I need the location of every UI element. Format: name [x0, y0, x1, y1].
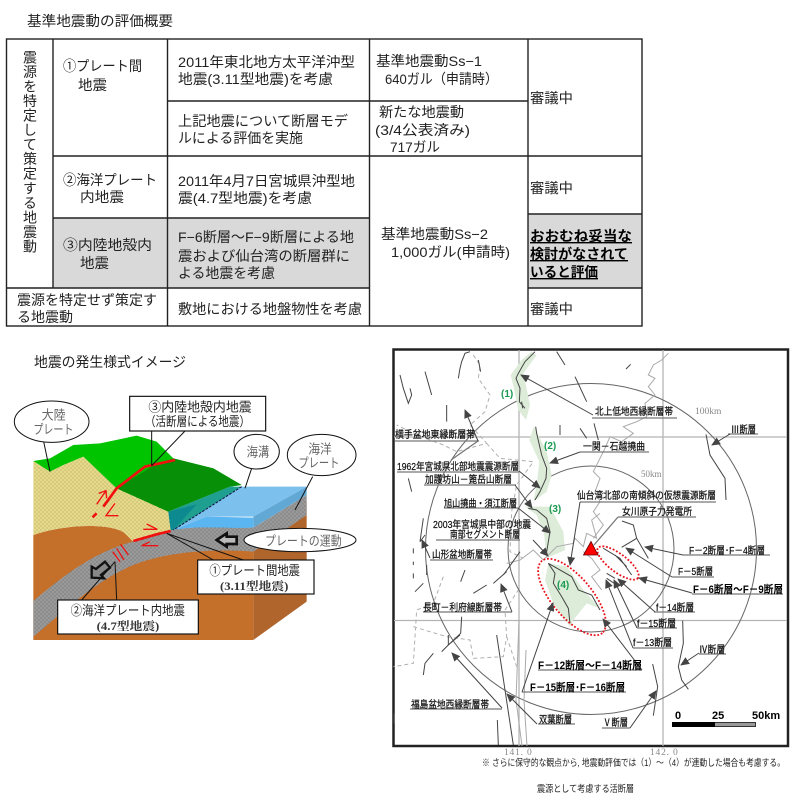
row 1 label: 地震 — [78, 77, 107, 93]
dotted ellipse: fault group 4 — [526, 548, 618, 646]
Ss-1: 基準地震動Ss−1 — [376, 53, 482, 69]
callout: interplate earthquake — [198, 560, 314, 594]
row 1 condition B: ルによる評価を実施 — [178, 130, 303, 146]
status: under review — [530, 90, 573, 317]
status: generally appropriate: おおむね妥当な — [530, 228, 632, 244]
callout: intraslab earthquake: ②海洋プレート内地震 — [71, 603, 185, 618]
status: generally appropriate — [530, 228, 632, 280]
circle distance labels: 50km — [641, 469, 662, 479]
fault labels: 一関－石越撓曲 — [583, 440, 645, 453]
status: under review: 審議中 — [530, 301, 573, 317]
row 1 label — [63, 58, 142, 93]
row 2 label — [63, 172, 157, 205]
fault labels: 仙台湾北部の南傾斜の仮想震源断層 — [577, 489, 716, 502]
arrow: subduction — [92, 562, 110, 578]
fault labels: F－6断層～F－9断層 — [693, 582, 783, 596]
graticule — [394, 350, 787, 746]
ellipse: oceanic plate — [287, 434, 356, 476]
fault labels: F－2断層･F－4断層 — [689, 545, 765, 557]
ellipse: plate motion: プレートの運動 — [265, 534, 342, 549]
arrow: plate movement — [217, 533, 237, 547]
green fault zones — [511, 352, 600, 627]
diagram: plate cross-section — [14, 396, 356, 640]
heading: earthquake type image: 地震の発生様式イメージ — [34, 354, 186, 370]
fault labels: 横手盆地東縁断層帯 — [395, 428, 475, 441]
longitude labels — [504, 748, 679, 758]
shaded cells — [53, 214, 642, 288]
fault labels: Ⅲ断層 — [731, 424, 756, 436]
callout: intraslab earthquake — [58, 600, 198, 634]
row 3 condition: F−6断層～F−9断層による地 — [178, 229, 354, 245]
Ss-1: 640ガル（申請時） — [385, 71, 498, 87]
fault labels: f－13断層 — [633, 637, 672, 649]
row 4 label: 震源を特定せず策定す — [17, 292, 157, 308]
map caption: 震源として考慮する活断層 — [537, 783, 634, 795]
callout: interplate earthquake: ①プレート間地震 — [209, 563, 300, 578]
icon: Onagawa nuclear power station — [584, 542, 598, 555]
Ss-1 — [376, 53, 498, 87]
fault labels: 1962年宮城県北部地震震源断層 — [397, 460, 519, 473]
fault labels: 福島盆地西縁断層帯 — [411, 698, 489, 711]
scale bar — [672, 710, 780, 727]
leader arrows — [422, 375, 730, 728]
fault labels: 2003年宮城県中部の地震 — [433, 518, 531, 531]
continental plate — [33, 457, 171, 542]
red fault lines — [93, 460, 175, 562]
Ss-2 — [381, 226, 510, 260]
fault labels: 加護坊山－篦岳山断層 — [425, 473, 512, 486]
scale bar: 50km — [752, 710, 780, 722]
new ground motion — [375, 104, 470, 155]
map: active faults — [393, 350, 788, 746]
callout: inland crustal earthquake: （活断層による地震） — [145, 414, 250, 429]
row 2 condition: 震(4.7型地震)を考慮 — [178, 190, 312, 206]
table: evaluation overview — [6, 39, 642, 326]
new ground motion: 新たな地震動 — [379, 104, 464, 120]
fault labels: F－5断層 — [678, 566, 713, 578]
row 2 condition — [178, 173, 355, 206]
row 2 label: ②海洋プレート — [63, 172, 157, 188]
scale bar: 25 — [712, 710, 724, 722]
scale bar: 0 — [675, 710, 681, 722]
dotted ellipse: F-6 to F-9 — [593, 541, 643, 585]
sea surface — [173, 487, 307, 530]
coastline and prefectural borders — [393, 353, 668, 746]
fault labels: f－15断層 — [637, 618, 676, 630]
new ground motion: (3/4公表済み) — [375, 122, 470, 138]
fault labels: 山形盆地断層帯 — [432, 548, 492, 561]
table grid — [6, 39, 642, 326]
fault labels: 双葉断層 — [539, 713, 572, 726]
status: under review: 審議中 — [530, 90, 573, 106]
group numbers: (4) — [557, 580, 569, 591]
fault labels — [395, 405, 783, 729]
brown mantle block — [33, 526, 253, 640]
fault labels: 南部セグメント断層 — [450, 528, 520, 541]
row 4 condition: 敷地における地盤物性を考慮 — [178, 301, 362, 317]
row 2 condition: 2011年4月7日宮城県沖型地 — [178, 173, 355, 189]
Ss-2: 1,000ガル(申請時) — [391, 244, 510, 260]
group numbers: (3) — [549, 504, 561, 515]
status: generally appropriate: いると評価 — [530, 264, 598, 280]
leader lines — [43, 431, 313, 600]
longitude labels: 142. 0 — [650, 748, 679, 758]
row 3 condition — [178, 229, 354, 281]
ellipse: continental plate: 大陸 — [42, 407, 66, 422]
ellipse: trench — [234, 434, 279, 469]
fault labels: Ⅳ断層 — [699, 644, 725, 656]
fault labels: 長町－利府線断層帯 — [423, 601, 502, 614]
row 2 label: 内地震 — [80, 189, 124, 205]
row 3 label: ③内陸地殻内 — [63, 237, 152, 253]
fault labels: 旭山撓曲・須江断層 — [444, 498, 517, 510]
longitude labels: 141. 0 — [504, 748, 533, 758]
row 1 condition A: 地震(3.11型地震)を考慮 — [178, 71, 333, 87]
land surface — [33, 436, 242, 512]
status: under review: 審議中 — [530, 180, 573, 196]
row 3 condition: よる地震を考慮 — [178, 265, 275, 281]
fault labels: 女川原子力発電所 — [622, 505, 692, 518]
circle distance labels: 100km — [695, 407, 722, 417]
group numbers: (1) — [501, 389, 513, 400]
oceanic plate band — [33, 495, 307, 637]
title: evaluation overview: 基準地震動の評価概要 — [27, 13, 173, 29]
row 3 label — [63, 237, 152, 271]
ellipse: trench: 海溝 — [247, 445, 269, 460]
row 1 condition B: 上記地震について断層モデ — [178, 113, 348, 129]
fault labels: F－12断層～F－14断層 — [538, 658, 642, 672]
circle distance labels — [641, 407, 722, 479]
distance circles — [426, 384, 756, 714]
group numbers — [501, 389, 569, 591]
row 3 condition: 震および仙台湾の断層群に — [178, 248, 350, 264]
fault labels: 北上低地西縁断層帯 — [595, 405, 673, 418]
callout: interplate earthquake: (3.11型地震) — [220, 579, 289, 593]
ellipse: oceanic plate: 海洋 — [308, 441, 332, 456]
ellipse: continental plate — [14, 401, 89, 442]
fault traces — [394, 352, 726, 745]
status: generally appropriate: 検討がなされて — [530, 246, 628, 262]
callout: inland crustal earthquake — [130, 396, 266, 431]
row 1 label: ①プレート間 — [63, 58, 142, 74]
ellipse: oceanic plate: プレート — [298, 455, 339, 470]
fault labels: f－14断層 — [656, 602, 694, 614]
callout: intraslab earthquake: (4.7型地震) — [97, 619, 160, 633]
row 1 condition A — [178, 54, 355, 87]
group numbers: (2) — [544, 441, 556, 452]
new ground motion: 717ガル — [390, 139, 440, 155]
row 1 condition B — [178, 113, 348, 146]
Ss-2: 基準地震動Ss−2 — [381, 226, 488, 242]
map frame — [394, 350, 788, 746]
row 3 label: 地震 — [80, 255, 109, 271]
fault labels: Ⅴ断層 — [603, 717, 628, 729]
ellipse: continental plate: プレート — [33, 422, 73, 437]
ellipse: plate motion — [244, 528, 356, 552]
row 4 label — [17, 292, 157, 325]
label underlines — [395, 418, 783, 728]
row 1 condition A: 2011年東北地方太平洋沖型 — [178, 54, 355, 70]
callout: inland crustal earthquake: ③内陸地殻内地震 — [148, 400, 252, 415]
fault labels: F－15断層･F－16断層 — [530, 680, 625, 694]
row 4 label: る地震動 — [17, 309, 73, 325]
vertical header: sources specified: 震源を特定して策定する地震動 — [22, 50, 38, 254]
